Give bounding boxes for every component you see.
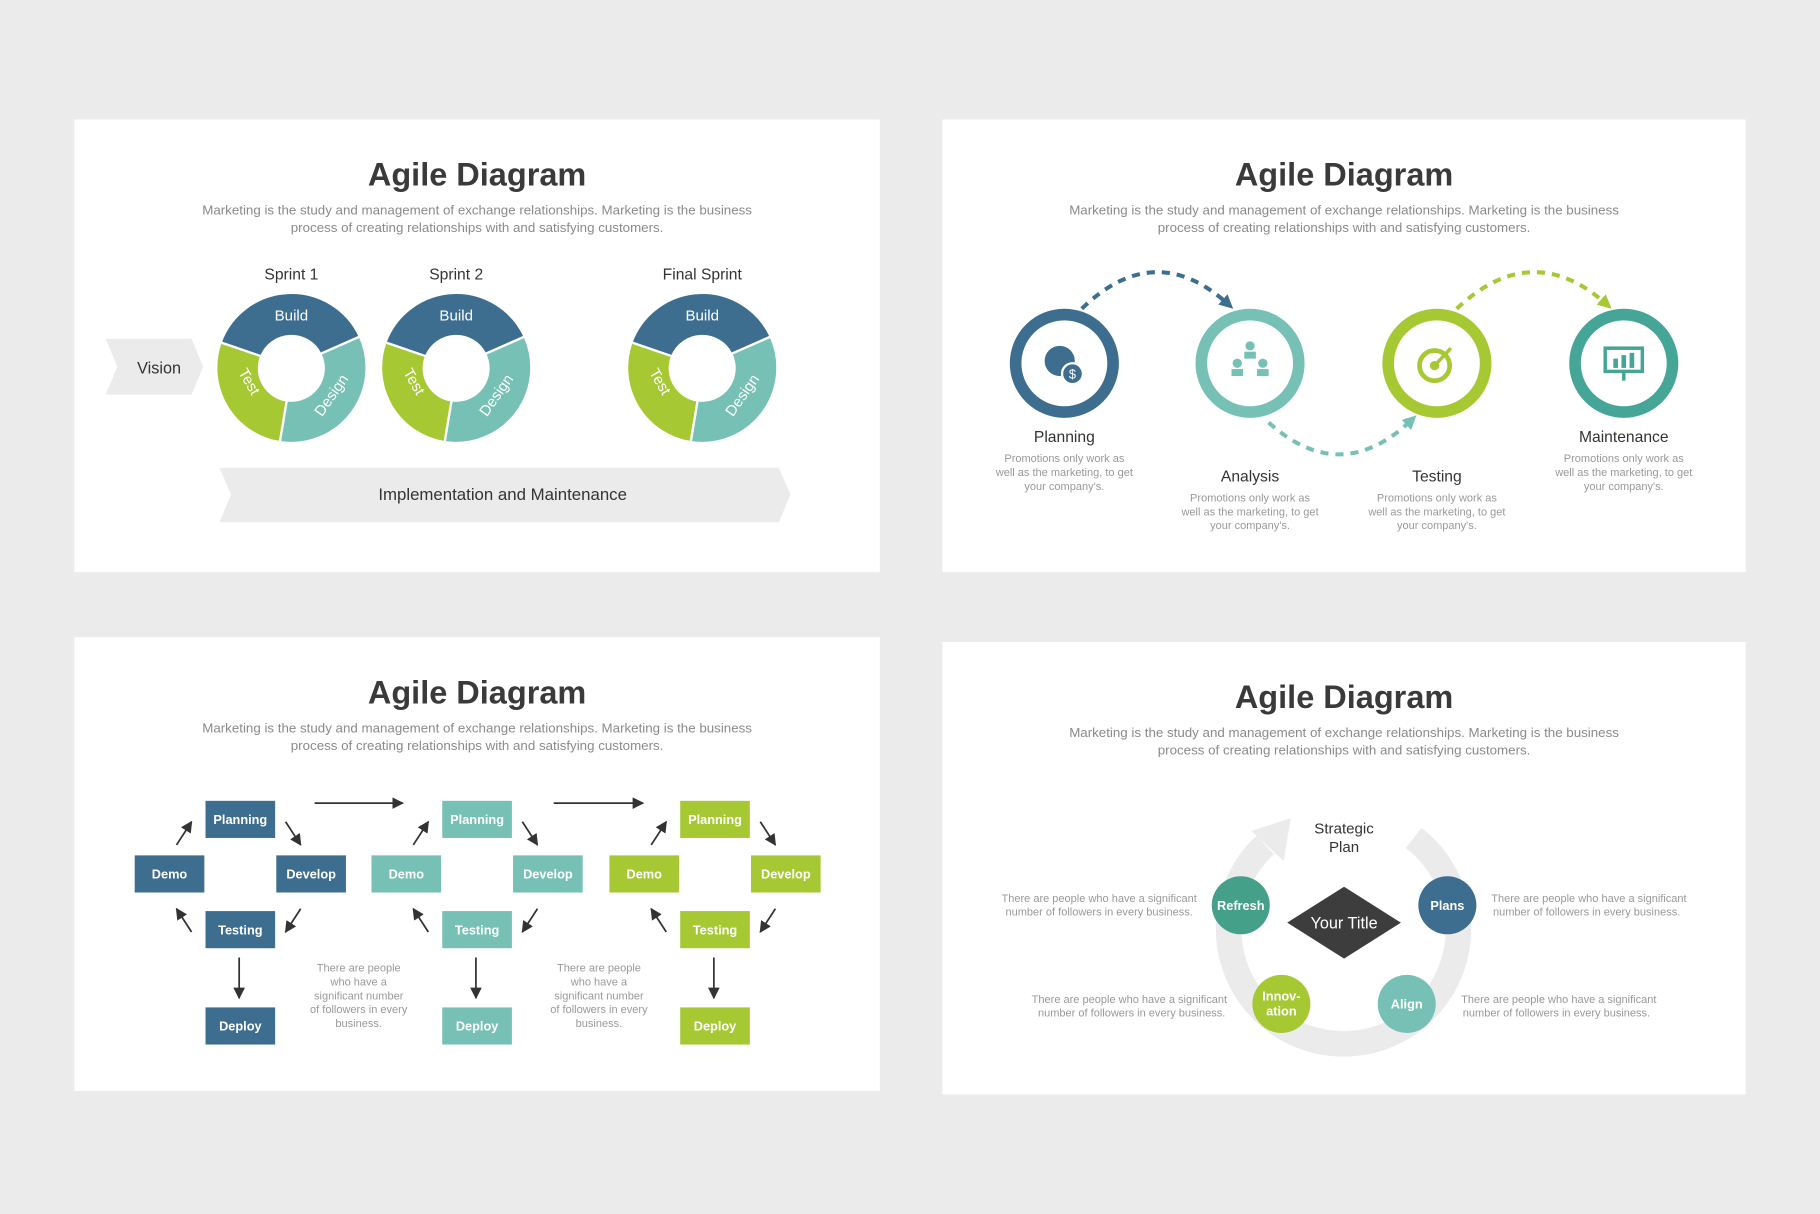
cluster 1: Develop	[286, 867, 336, 882]
implementation band	[219, 468, 790, 522]
step: testing: well as the marketing, to get	[1367, 506, 1505, 518]
donut: final sprint: Test	[645, 366, 674, 399]
text blocks: There are people who have a significant	[1032, 994, 1227, 1006]
donut: sprint 1: Sprint 1	[264, 267, 318, 284]
cluster 2: Planning	[450, 812, 504, 827]
step: analysis: Analysis	[1221, 469, 1279, 486]
donut: sprint 1: Design	[311, 371, 352, 420]
step: analysis: Promotions only work as	[1190, 492, 1311, 504]
donut: sprint 1: Build	[275, 307, 308, 324]
step: planning: your company's.	[1024, 481, 1104, 493]
cluster 1: Demo	[152, 867, 187, 882]
cluster 3: Demo	[627, 867, 662, 882]
node: align	[1378, 975, 1436, 1033]
node: innovation: ation	[1266, 1004, 1297, 1019]
node: plans	[1418, 876, 1476, 934]
label: strategic plan: Strategic	[1314, 820, 1374, 837]
cluster 3: Develop	[761, 867, 811, 882]
text blocks: There are people who have a significant	[1461, 994, 1656, 1006]
node: innovation: Innov-	[1262, 988, 1301, 1003]
cluster 1	[135, 801, 408, 1045]
title: Agile Diagram	[1235, 157, 1453, 193]
title: Agile Diagram	[368, 157, 586, 193]
cluster 1: of followers in every	[310, 1004, 408, 1016]
subtitle	[202, 720, 752, 753]
text blocks: There are people who have a significant	[1491, 893, 1687, 905]
node: innovation	[1252, 975, 1310, 1033]
vision chevron	[106, 339, 203, 395]
step: testing: your company's.	[1397, 520, 1477, 532]
arrow: dashed blue	[1082, 272, 1228, 309]
step: maintenance	[1554, 315, 1692, 493]
diamond: your title: Your Title	[1311, 914, 1378, 932]
cluster 1: significant number	[314, 990, 404, 1002]
diamond: your title	[1287, 887, 1401, 959]
donut: sprint 2: Test	[399, 366, 428, 399]
step: testing	[1367, 315, 1505, 532]
panel: sprints	[74, 120, 880, 572]
cluster 2: significant number	[554, 990, 644, 1002]
step: planning: Promotions only work as	[1004, 453, 1125, 465]
subtitle: process of creating relationships with and satisfying customers.	[1158, 220, 1530, 235]
node: align: Align	[1391, 997, 1423, 1012]
arrow: cluster link 1	[315, 802, 403, 804]
step: analysis: your company's.	[1210, 520, 1290, 532]
subtitle: Marketing is the study and management of exchange relationships. Marketing is the business	[1069, 725, 1619, 740]
cluster 1: Planning	[213, 812, 267, 827]
subtitle: process of creating relationships with and satisfying customers.	[291, 220, 663, 235]
step: testing: Promotions only work as	[1377, 492, 1497, 504]
step: planning	[995, 315, 1133, 493]
panel: strategic plan	[942, 642, 1746, 1094]
cluster 1: who have a	[330, 976, 388, 988]
cluster 1: Testing	[218, 922, 263, 937]
donut: sprint 2: Build	[439, 307, 473, 324]
cluster 3: Planning	[688, 812, 742, 827]
step: analysis: well as the marketing, to get	[1180, 506, 1319, 518]
title: Agile Diagram	[368, 674, 586, 710]
cluster 2: Deploy	[456, 1019, 499, 1034]
text blocks: There are people who have a significant	[1002, 893, 1197, 905]
donut: sprint 1	[216, 267, 367, 443]
cluster 2: who have a	[570, 976, 628, 988]
cluster 1: Deploy	[219, 1019, 262, 1034]
step: analysis	[1180, 315, 1319, 532]
subtitle: process of creating relationships with and satisfying customers.	[1158, 742, 1530, 757]
node: refresh	[1212, 876, 1270, 934]
vision chevron: Vision	[137, 360, 181, 378]
cluster 1: business.	[335, 1018, 382, 1030]
subtitle	[1069, 203, 1619, 235]
text blocks: number of followers in every business.	[1463, 1008, 1650, 1020]
subtitle	[202, 203, 752, 235]
label: strategic plan: Plan	[1329, 839, 1359, 856]
donut: final sprint: Build	[685, 307, 719, 324]
cluster 3: Testing	[693, 922, 737, 937]
implementation band: Implementation and Maintenance	[378, 485, 627, 504]
donut: sprint 2: Sprint 2	[429, 267, 483, 284]
donut: sprint 2	[381, 267, 531, 443]
subtitle: Marketing is the study and management of exchange relationships. Marketing is the business	[202, 203, 752, 218]
step: maintenance: Promotions only work as	[1564, 453, 1684, 465]
step: testing: Testing	[1412, 469, 1462, 486]
text blocks: number of followers in every business.	[1038, 1008, 1225, 1020]
step: maintenance: Maintenance	[1579, 429, 1669, 446]
text blocks	[1002, 893, 1687, 1020]
panel: flow boxes	[74, 637, 880, 1091]
arrow: dashed green	[1457, 272, 1606, 309]
subtitle: Marketing is the study and management of exchange relationships. Marketing is the business	[1069, 203, 1619, 218]
node: refresh: Refresh	[1217, 898, 1265, 913]
node: plans: Plans	[1430, 898, 1464, 913]
cluster 3: Deploy	[694, 1019, 737, 1034]
step: planning: Planning	[1034, 429, 1095, 446]
step: planning: well as the marketing, to get	[995, 467, 1133, 479]
panel: process circles	[942, 120, 1746, 572]
donut: final sprint	[627, 267, 777, 443]
cluster 2: Testing	[455, 922, 499, 937]
arrow: dashed teal	[1269, 420, 1411, 454]
text blocks: number of followers in every business.	[1006, 907, 1193, 919]
cycle arc	[1229, 818, 1458, 1044]
cluster 2	[371, 801, 648, 1045]
subtitle: process of creating relationships with and satisfying customers.	[291, 738, 663, 753]
title: Agile Diagram	[1235, 679, 1453, 715]
step: planning: $	[1069, 366, 1076, 381]
cluster 2: There are people	[557, 962, 641, 974]
step: maintenance: your company's.	[1584, 481, 1664, 493]
label: strategic plan	[1314, 820, 1374, 856]
cluster 2: business.	[576, 1018, 622, 1030]
donut: sprint 1: Test	[235, 366, 264, 399]
donut: final sprint: Final Sprint	[663, 267, 742, 284]
cluster 1: There are people	[317, 962, 401, 974]
cluster 3	[609, 801, 821, 1045]
arrow: cluster link 2	[554, 802, 643, 804]
cluster 2: Demo	[389, 867, 424, 882]
subtitle	[1069, 725, 1619, 757]
donut: final sprint: Design	[722, 371, 763, 420]
step: maintenance: well as the marketing, to get	[1554, 467, 1692, 479]
donut: sprint 2: Design	[476, 371, 517, 420]
subtitle: Marketing is the study and management of exchange relationships. Marketing is the business	[202, 720, 752, 735]
text blocks: number of followers in every business.	[1493, 907, 1680, 919]
cluster 2: of followers in every	[550, 1004, 648, 1016]
cluster 2: Develop	[523, 867, 573, 882]
